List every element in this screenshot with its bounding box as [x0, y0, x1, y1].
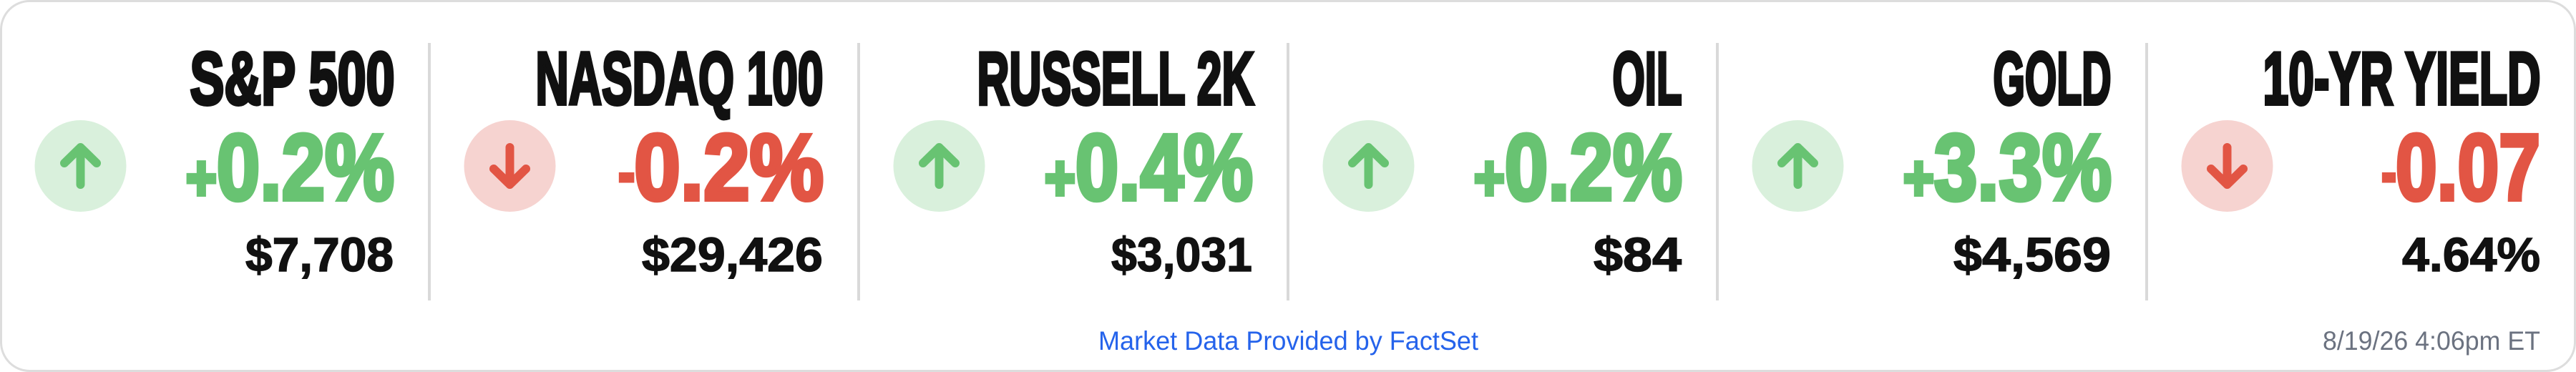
- panel: NASDAQ 100: [464, 37, 824, 282]
- icon: down arrow: [2181, 120, 2273, 212]
- price: RUSSELL 2K: $3,031: [1111, 228, 1252, 282]
- change: S&P 500: +0.2%: [186, 114, 394, 220]
- heading: GOLD: GOLD: [1994, 37, 2111, 120]
- footer: timestamp: 8/19/26 4:06pm ET: [2323, 326, 2540, 356]
- change: OIL: +0.2%: [1474, 114, 1682, 220]
- icon: up arrow: [893, 120, 985, 212]
- price: OIL: $84: [1594, 228, 1682, 282]
- price: NASDAQ 100: $29,426: [642, 228, 823, 282]
- icon: up arrow: [1322, 120, 1414, 212]
- icon: up arrow: [34, 120, 126, 212]
- change: RUSSELL 2K: +0.4%: [1045, 114, 1253, 220]
- change: NASDAQ 100: -: [619, 145, 634, 202]
- heading: S&P 500: S&P 500: [190, 37, 395, 120]
- panel: 10-YR YIELD: [2181, 37, 2540, 282]
- change: 10-YR YIELD: -: [2382, 145, 2396, 202]
- panel: RUSSELL 2K: [893, 37, 1254, 282]
- heading: OIL: OIL: [1613, 37, 1682, 120]
- panel: S&P 500: [34, 37, 395, 282]
- price: 10-YR YIELD: 4.64%: [2402, 228, 2540, 282]
- change: NASDAQ 100: 0.2%: [634, 114, 824, 220]
- footer: data source: Market Data Provided by FactSet: [1098, 326, 1479, 356]
- panel: OIL: [1322, 37, 1682, 282]
- change: GOLD: +3.3%: [1903, 114, 2112, 220]
- price: S&P 500: $7,708: [245, 228, 394, 282]
- panel: GOLD: [1752, 37, 2112, 282]
- heading: RUSSELL 2K: RUSSELL 2K: [977, 37, 1254, 120]
- icon: down arrow: [464, 120, 555, 212]
- icon: up arrow: [1752, 120, 1843, 212]
- heading: NASDAQ 100: NASDAQ 100: [535, 37, 823, 120]
- price: GOLD: $4,569: [1953, 228, 2111, 282]
- change: 10-YR YIELD: 0.07: [2396, 114, 2540, 220]
